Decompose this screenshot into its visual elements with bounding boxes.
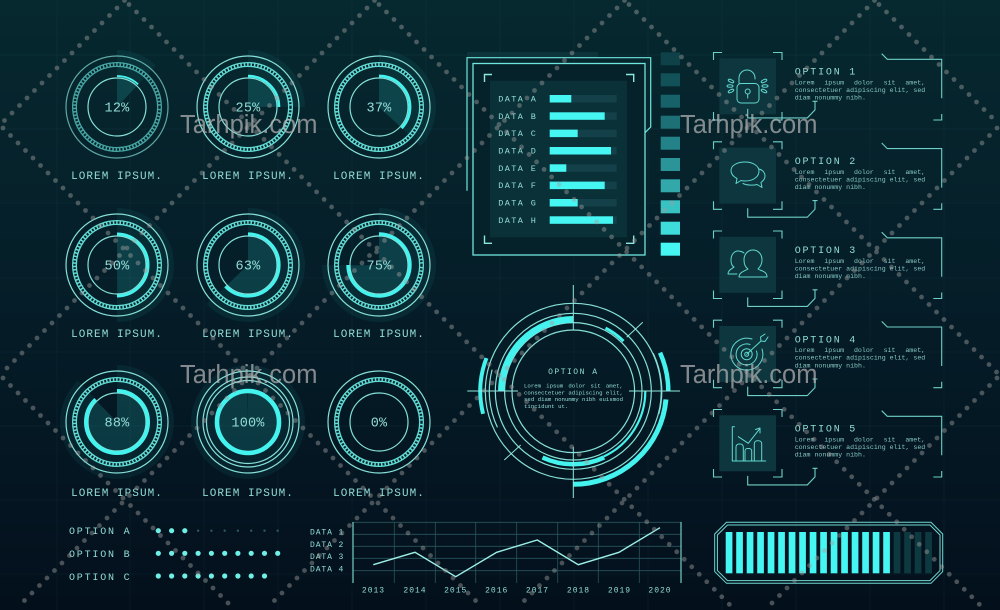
option 1 body: consectetuer adipiscing elit, sed — [795, 87, 925, 94]
chart x labels: 2013 — [362, 587, 385, 596]
option 5 body: consectetuer adipiscing elit, sed — [795, 444, 925, 451]
gauge 88% — [66, 371, 168, 500]
option 2 body — [795, 169, 925, 191]
option 3 body: diam nonummy nibh. — [795, 273, 866, 280]
gauge 63%: LOREM IPSUM. — [202, 329, 294, 341]
gauge 100%: 100% — [231, 416, 265, 432]
bar data g: DATA G — [498, 198, 537, 208]
option 2 body: Lorem ipsum dolor sit amet, — [795, 169, 925, 176]
watermark text — [180, 111, 817, 389]
bar data b — [498, 112, 617, 122]
option c row — [69, 573, 267, 584]
radial body text: tincidunt ut. — [524, 403, 568, 410]
chart x labels — [362, 587, 672, 596]
option b row — [69, 550, 280, 561]
gauge 0%: 0% — [371, 416, 388, 432]
option 4 — [714, 320, 942, 396]
gauge 75% — [328, 214, 430, 341]
radial body text: Lorem ipsum dolor sit amet, — [524, 382, 623, 389]
option 1 title: OPTION 1 — [795, 68, 857, 79]
radial heading: OPTION A — [548, 368, 599, 377]
bar data f: DATA F — [498, 181, 537, 191]
bar data e — [498, 164, 617, 174]
option 3 body: Lorem ipsum dolor sit amet, — [795, 258, 925, 265]
gauge 100%: LOREM IPSUM. — [202, 488, 294, 500]
chart x labels: 2015 — [444, 587, 467, 596]
gauge 75%: LOREM IPSUM. — [333, 329, 425, 341]
bar data h — [498, 216, 617, 226]
option c row: OPTION C — [69, 573, 131, 584]
radial body text: consectetuer adipiscing elit, — [524, 389, 623, 396]
icon: lock — [727, 70, 768, 103]
bar data d: DATA D — [498, 146, 537, 156]
gauge 12% — [66, 56, 168, 183]
filled segments — [726, 532, 890, 573]
chart y labels: DATA 3 — [310, 553, 344, 562]
option 5 body: Lorem ipsum dolor sit amet, — [795, 436, 925, 444]
gauge 12%: LOREM IPSUM. — [71, 171, 163, 183]
option 1 body: diam nonummy nibh. — [795, 95, 866, 102]
colour scale squares — [661, 52, 680, 256]
bar data c — [498, 129, 617, 139]
bar data h: DATA H — [498, 216, 537, 226]
gauge 75%: 75% — [367, 260, 392, 274]
gauge 88%: 88% — [105, 416, 130, 432]
icon: chat bubbles — [731, 162, 765, 188]
gauge 25%: 25% — [236, 102, 261, 116]
progress bar — [715, 522, 943, 583]
bar data f — [498, 181, 617, 191]
gauge 50% — [66, 214, 168, 341]
line chart — [310, 522, 681, 596]
option 1 body: Lorem ipsum dolor sit amet, — [795, 80, 925, 86]
option 2 body: diam nonummy nibh. — [795, 184, 866, 191]
icon: people — [728, 250, 767, 277]
chart x labels: 2019 — [608, 587, 631, 596]
option 4 body: diam nonummy nibh. — [795, 362, 866, 369]
gauge 12%: 12% — [105, 102, 130, 116]
watermark text: Tarhpik.com — [180, 111, 317, 139]
bar data a — [498, 94, 617, 104]
option 2 title: OPTION 2 — [795, 157, 857, 168]
bar data a: DATA A — [498, 94, 537, 104]
radial body text — [524, 382, 623, 410]
chart y labels: DATA 4 — [310, 565, 344, 574]
watermark text: Tarhpik.com — [680, 361, 817, 389]
gauge 37%: LOREM IPSUM. — [333, 171, 425, 183]
chart x labels: 2020 — [648, 587, 672, 596]
option dot rows — [69, 527, 280, 584]
option 1 body — [795, 80, 925, 102]
option a row: OPTION A — [69, 527, 131, 538]
option 4 body: consectetuer adipiscing elit, sed — [795, 355, 925, 362]
gauge 25%: LOREM IPSUM. — [202, 171, 294, 183]
chart y labels: DATA 1 — [310, 529, 344, 538]
gauge 100% — [197, 371, 299, 500]
option 3 title: OPTION 3 — [795, 246, 857, 257]
option 5 title: OPTION 5 — [795, 425, 857, 436]
watermark text: Tarhpik.com — [680, 111, 817, 139]
gauge 50%: 50% — [105, 260, 130, 274]
gauge 88%: LOREM IPSUM. — [71, 488, 163, 500]
option 2 — [714, 142, 942, 217]
bar data g — [498, 198, 617, 208]
option 1 — [714, 52, 942, 120]
option 5 body: diam nonummy nibh. — [795, 452, 866, 459]
chart x labels: 2016 — [485, 587, 508, 596]
gauge 0% — [328, 371, 430, 500]
panel: data bars — [467, 52, 651, 255]
option 3 body: consectetuer adipiscing elit, sed — [795, 266, 925, 272]
chart x labels: 2014 — [403, 587, 427, 596]
gauge 63% — [197, 214, 299, 341]
gauge 25% — [197, 56, 299, 183]
gauge 37% — [328, 56, 430, 183]
option a row — [69, 527, 279, 538]
chart y labels — [310, 529, 344, 574]
gauge 0%: LOREM IPSUM. — [333, 488, 425, 500]
gauge 63%: 63% — [236, 260, 261, 274]
icon: growth chart — [732, 427, 766, 461]
option 4 body: Lorem ipsum dolor sit amet, — [795, 347, 925, 354]
chart line — [373, 528, 660, 577]
option 3 body — [795, 258, 925, 280]
empty segments — [894, 532, 932, 573]
chart x labels: 2018 — [567, 587, 590, 596]
watermark text: Tarhpik.com — [180, 361, 317, 389]
option 5 — [714, 410, 942, 485]
option 4 body — [795, 347, 925, 369]
option 3 — [714, 231, 942, 306]
bar data b: DATA B — [498, 112, 537, 122]
bar data e: DATA E — [498, 164, 537, 174]
radial body text: sed diam nonummy nibh euismod — [524, 396, 623, 403]
chart x labels: 2017 — [526, 587, 549, 596]
icon: target — [731, 334, 768, 370]
gauge 50%: LOREM IPSUM. — [71, 329, 163, 341]
radial option a diagram — [448, 266, 699, 517]
option 5 body — [795, 436, 925, 459]
chart y labels: DATA 2 — [310, 541, 344, 550]
bar data d — [498, 146, 617, 156]
option 2 body: consectetuer adipiscing elit, sed — [795, 176, 925, 183]
gauge 37%: 37% — [367, 102, 392, 116]
option b row: OPTION B — [69, 550, 131, 561]
bar data c: DATA C — [498, 129, 537, 139]
option 4 title: OPTION 4 — [795, 335, 857, 346]
